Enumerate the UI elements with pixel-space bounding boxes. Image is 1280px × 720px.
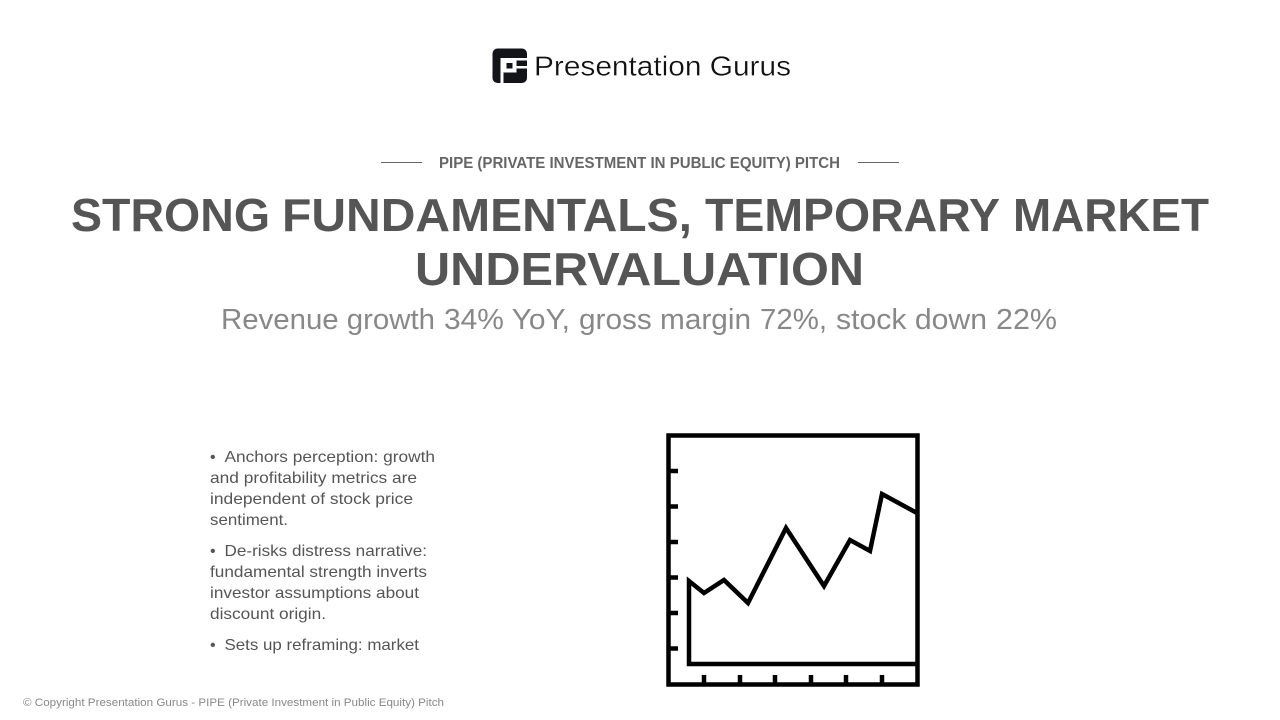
text block: bullet points: Anchors perception: growth	[224, 449, 435, 466]
footer copyright: © Copyright Presentation Gurus - PIPE (Private Investment in Public Equity) Pitch	[23, 697, 444, 709]
subtitle: stock down	[836, 304, 987, 336]
subtitle	[221, 304, 1057, 336]
title: STRONG	[71, 189, 270, 241]
text block: bullet points: sentiment.	[210, 512, 288, 529]
subtitle: gross margin	[579, 304, 751, 336]
text block: bullet points: discount origin.	[210, 606, 326, 623]
logo wordmark: Presentation Gurus	[534, 50, 791, 82]
text block: bullet points: independent of stock price	[210, 491, 413, 508]
icon: line chart	[668, 436, 918, 684]
title: TEMPORARY	[705, 189, 1000, 241]
title	[71, 189, 1209, 295]
text block: bullet points: investor assumptions about	[210, 585, 420, 602]
logo: Presentation Gurus	[492, 48, 791, 83]
text block: bullet points	[210, 449, 435, 654]
text block: bullet points: fundamental strength inverts	[210, 564, 427, 581]
subtitle: 72%,	[760, 304, 827, 336]
text block: bullet points: De-risks distress narrative:	[224, 543, 427, 560]
title: UNDERVALUATION	[415, 243, 864, 295]
text block: bullet points: Sets up reframing: market	[224, 637, 420, 654]
kicker heading: PIPE (PRIVATE INVESTMENT IN PUBLIC EQUITY) PITCH	[439, 155, 840, 172]
subtitle: 22%	[996, 304, 1057, 336]
title: FUNDAMENTALS,	[282, 189, 692, 241]
icon: logo mark	[492, 48, 527, 83]
text block: bullet points: •	[210, 543, 216, 560]
text block: bullet points: •	[210, 637, 216, 654]
subtitle: 34% YoY,	[444, 304, 570, 336]
text block: bullet points: •	[210, 449, 216, 466]
text block: bullet points: and profitability metrics are	[210, 470, 417, 487]
subtitle: Revenue growth	[221, 304, 435, 336]
title: MARKET	[1013, 189, 1209, 241]
